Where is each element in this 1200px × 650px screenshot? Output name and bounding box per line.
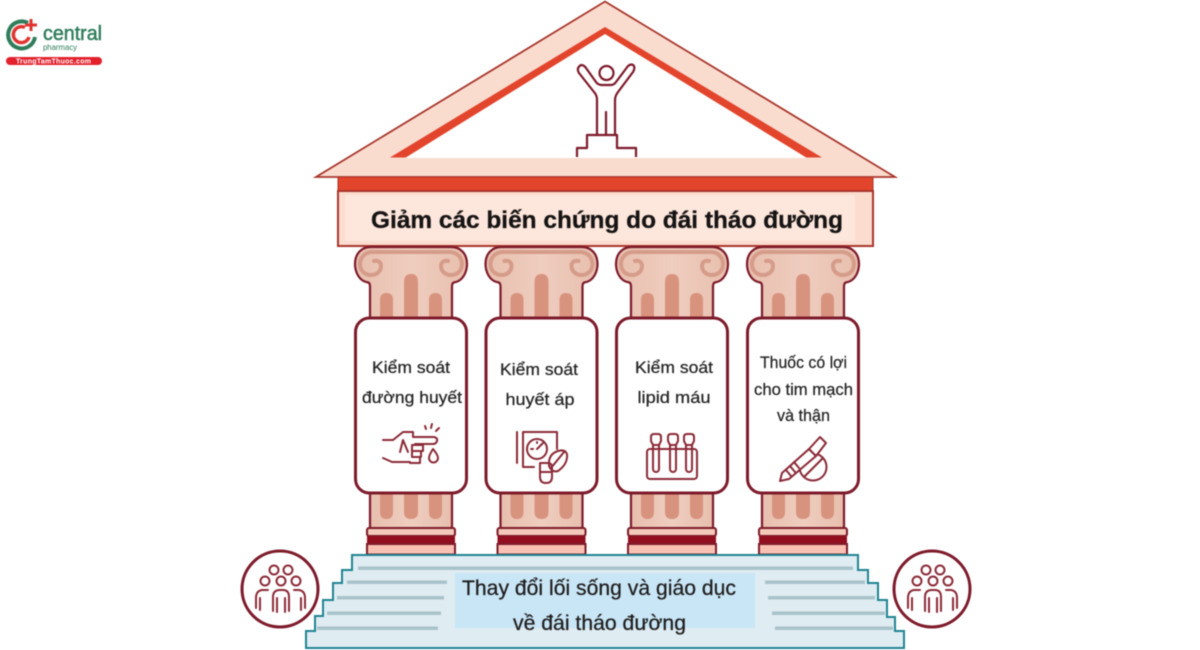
icon: test tubes — [647, 434, 697, 479]
logo url pill: TrungTamThuoc.com — [16, 58, 91, 66]
label: Thuốc có lợi cho tim mạch và thận: và thận — [777, 406, 830, 425]
temple roof — [316, 2, 895, 177]
logo: Central Pharmacy — [6, 19, 102, 66]
icon: blood pressure monitor — [517, 432, 567, 483]
label: Kiểm soát đường huyết: đường huyết — [362, 388, 462, 407]
label: Thuốc có lợi cho tim mạch và thận: Thuốc có lợi — [760, 353, 847, 372]
label: Kiểm soát lipid máu: lipid máu — [638, 388, 710, 407]
icon: community right — [894, 551, 970, 627]
pillar 1: blood glucose — [355, 247, 467, 554]
logo subtext: pharmacy — [43, 43, 77, 52]
label: Kiểm soát đường huyết — [362, 358, 462, 407]
foundation text: về đái tháo đường — [513, 612, 686, 635]
pillar 2: blood pressure — [486, 247, 598, 554]
label: Kiểm soát huyết áp: huyết áp — [506, 390, 574, 409]
label: Kiểm soát đường huyết: Kiểm soát — [372, 358, 450, 377]
label: Kiểm soát lipid máu: Kiểm soát — [635, 358, 713, 377]
icon: community left — [242, 551, 318, 627]
foundation text — [462, 577, 736, 635]
icon: finger prick — [383, 424, 439, 463]
label: Kiểm soát lipid máu — [635, 358, 713, 407]
label: Thuốc có lợi cho tim mạch và thận — [754, 353, 853, 425]
label: Kiểm soát huyết áp — [500, 360, 578, 409]
pillar 4: cardio-renal drugs — [747, 247, 859, 554]
label: Kiểm soát huyết áp: Kiểm soát — [500, 360, 578, 379]
label: Thuốc có lợi cho tim mạch và thận: cho tim mạch — [754, 380, 853, 399]
stairs foundation — [306, 555, 904, 648]
icon: person raising arms on podium — [577, 64, 636, 157]
foundation text: Thay đổi lối sống và giáo dục — [462, 577, 736, 600]
architrave banner — [338, 177, 873, 246]
logo wordmark: central — [43, 23, 102, 45]
pillar 3: lipid — [616, 247, 728, 554]
icon: insulin pen and pill — [780, 437, 826, 481]
logo mark — [8, 19, 37, 48]
title: Giảm các biến chứng do đái tháo đường — [371, 207, 843, 234]
